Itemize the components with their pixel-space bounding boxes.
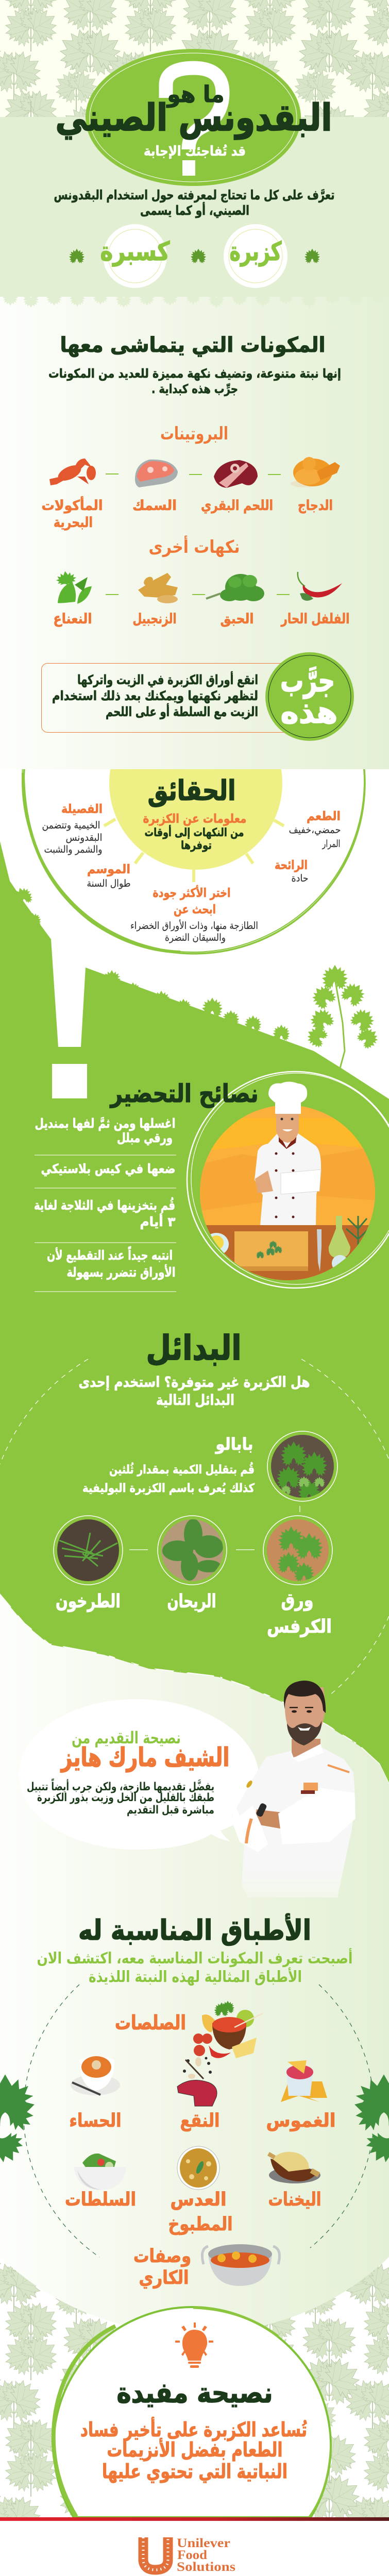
subtitle: قد تُفاجئك الإجابة: [144, 144, 246, 159]
icon: curry pot: [202, 2244, 279, 2286]
fact: family: البقدونس: [66, 832, 102, 843]
fact: aroma: الرائحة: [275, 858, 308, 872]
fact: aroma: [275, 858, 308, 884]
intro text: الصيني، أو كما يسمى: [140, 202, 249, 218]
badge: kuzbara: [224, 224, 287, 288]
culantro text: بابالو: [215, 1434, 253, 1454]
table: [206, 1216, 369, 1280]
big parsley leaves: [0, 2074, 389, 2171]
protein labels: البحرية: [54, 515, 93, 531]
uniform logo: [245, 1765, 349, 1794]
fact: quality: اختر الأكثر جودة: [153, 885, 231, 900]
description: جرِّب هذه كبداية .: [151, 382, 238, 396]
dish labels row 1: [69, 2110, 336, 2131]
tip 1: [35, 1116, 175, 1146]
icon: beef: [214, 460, 258, 488]
protein labels: الدجاج: [298, 498, 333, 514]
dish labels row 2: السلطات: [65, 2189, 136, 2210]
face: [285, 1687, 326, 1745]
dish labels row 2: العدس: [170, 2189, 227, 2210]
panel: chef advice: [19, 1681, 356, 1897]
callout text: لتظهر نكهتها ويمكنك بعد ذلك استخدام: [52, 688, 258, 704]
fact: taste: حمضي،خفيف: [289, 824, 341, 836]
fact: family: والشمر والشبت: [44, 844, 102, 855]
icon: basil: [206, 574, 264, 601]
icon: mint: [55, 570, 92, 604]
photo: celery leaf: [263, 1516, 332, 1585]
icon: ginger: [138, 573, 178, 603]
curry label: [133, 2246, 191, 2289]
icon: stew: [267, 2152, 320, 2183]
beard: [287, 1721, 322, 1745]
salsa label: الصلصات: [115, 2011, 186, 2034]
description: إنها نبتة متنوعة، وتضيف نكهة مميزة للعديد من المكونات: [48, 366, 341, 381]
facts intro: [143, 811, 246, 852]
callout box: [41, 664, 299, 733]
icon: spices: [183, 2057, 212, 2079]
culantro text: [82, 1434, 255, 1495]
chef illustration: [187, 1072, 389, 1288]
buttons: [275, 1152, 295, 1218]
tip text: الطعام بفضل الأنزيمات: [107, 2437, 282, 2462]
tip 4: الأوراق تتضرر بسهولة: [67, 1264, 175, 1280]
pale green band: [0, 117, 389, 295]
callout text: الزيت مع السلطة أو على اللحم: [106, 703, 258, 720]
icon: question mark: [166, 68, 223, 176]
hair: [284, 1681, 326, 1713]
dishes intro: [37, 1948, 352, 1986]
logo: Unilever Food Solutions: [143, 2536, 235, 2574]
advice text: [27, 1778, 214, 1817]
fact: quality: ابحث عن: [174, 902, 216, 917]
green background panel: [0, 841, 389, 1783]
heading: facts: الحقائق: [147, 774, 236, 807]
flavour labels: الفلفل الحار: [280, 611, 349, 627]
icon: lobster: [49, 459, 96, 485]
photo: chef Marc Heiz: [232, 1681, 356, 1897]
fact: family: [42, 802, 103, 855]
icon: chilli: [298, 572, 342, 601]
fact: quality: الطازجة منها، وذات الأوراق الخضراء: [130, 920, 258, 931]
icon: light bulb: [175, 2323, 213, 2368]
logo wordmark: Unilever: [177, 2536, 230, 2550]
panel: facts: [22, 769, 366, 955]
protein labels: السمك: [132, 498, 177, 514]
eyes: [290, 1707, 313, 1713]
mouth: [298, 1727, 311, 1731]
forearm: [255, 1170, 321, 1194]
orange circle: [200, 1105, 376, 1280]
rays: [104, 819, 284, 882]
curry label: وصفات: [133, 2246, 191, 2267]
tip 3: قُم بتخزينها في الثلاجة لغاية: [34, 1197, 175, 1213]
panel: suitable dishes: [0, 1913, 389, 2289]
heading: dishes: الأطباق المناسبة له: [78, 1913, 311, 1946]
heading: المكونات التي يتماشى معها: [60, 333, 326, 357]
photo: basil: [158, 1516, 227, 1585]
advice text: يفضَّل تقديمها طازجة، ولكن جرب أيضاً تتبيل: [27, 1778, 214, 1793]
tip 3: ٣ أيام: [140, 1213, 175, 1229]
panel: alternatives: [0, 1328, 389, 1695]
photo: culantro: [267, 1431, 337, 1502]
logo mark: [143, 2537, 168, 2570]
tip circle: [54, 2307, 331, 2517]
advice title: نصيحة التقديم من: [72, 1728, 181, 1748]
knife: [317, 1229, 322, 1272]
tip text: تُساعد الكزبرة على تأخير فساد: [80, 2417, 307, 2441]
chopped herbs: [256, 1241, 283, 1259]
protein labels: المأكولات: [41, 496, 103, 514]
heading: alternatives: البدائل: [146, 1328, 241, 1368]
advice text: مباشرة قبل التقديم: [127, 1804, 214, 1817]
fact: taste: المرار: [322, 838, 340, 850]
alternative labels: ورق: [281, 1590, 313, 1611]
footer bar: [0, 2517, 389, 2521]
chef jacket: [255, 1132, 321, 1225]
try-this badge: هذه: [280, 694, 338, 731]
tip 1: اغسلها ومن ثمَّ لفها بمنديل: [35, 1116, 175, 1131]
title: ما هو: [166, 81, 225, 108]
badge: kusbara: [100, 224, 170, 288]
title: [56, 81, 332, 140]
leafy edge: [0, 289, 389, 308]
parsley pattern background: [0, 0, 389, 117]
brush ring: [187, 1072, 389, 1288]
photo: tarragon: [53, 1516, 123, 1585]
fact: season: طوال السنة: [87, 878, 131, 889]
collar: [279, 1133, 297, 1149]
cutting board: [234, 1231, 308, 1271]
icon: salsa: [193, 2001, 263, 2058]
panel: ingredients: [0, 289, 389, 769]
logo wordmark: Food: [177, 2548, 207, 2562]
try-this badge: [265, 652, 354, 741]
logo wordmark: Solutions: [177, 2560, 235, 2574]
flavour labels: [54, 611, 349, 627]
icon: steak: [177, 2080, 217, 2106]
alternative labels: [56, 1590, 332, 1637]
fact: taste: الطعم: [307, 809, 341, 823]
oil bottle: [329, 1216, 350, 1272]
fact: season: [87, 862, 131, 889]
fact: family: الفصيلة: [61, 802, 103, 816]
heading: preparation tips: نصائح التحضير: [110, 1079, 259, 1108]
rosemary: [346, 1216, 368, 1246]
description: [48, 366, 341, 396]
panel: intro header: [0, 0, 389, 295]
tip 4: [47, 1246, 175, 1280]
chef hat: [268, 1082, 307, 1114]
callout: try this: [41, 652, 354, 741]
callout text: انقع أوراق الكزبرة في الزيت واتركها: [77, 671, 258, 688]
title: البقدونس الصيني: [56, 96, 332, 140]
yellow circle: [109, 769, 282, 870]
icon: lentil plate: [177, 2146, 219, 2190]
crossed arms: [232, 1788, 356, 1852]
alternatives intro: هل الكزبرة غير متوفرة؟ استخدم إحدى: [78, 1374, 310, 1391]
leafy edges of green panel: [5, 884, 365, 1754]
try-this badge: جرَّب: [280, 663, 335, 699]
lemon bowl: [210, 1233, 229, 1253]
fact: family: الخيمية وتتضمن: [42, 820, 100, 831]
tip 2: ضعها في كيس بلاستيكي: [41, 1161, 175, 1177]
dish labels row 2: [65, 2189, 322, 2235]
facts intro: معلومات عن الكزبرة: [143, 811, 246, 826]
badge: kuzbara: كزبرة: [230, 236, 282, 267]
culantro text: كذلك يُعرف باسم الكزبرة البوليفية: [82, 1482, 255, 1495]
panel: lower background: [0, 1595, 389, 2517]
brush stroke: [54, 2308, 331, 2517]
brush ring: [22, 769, 366, 955]
subheading: other flavours: نكهات أخرى: [148, 535, 240, 557]
advice text: طبقك بالقليل من الخل وزيت بذور الكزبرة: [37, 1791, 214, 1804]
connectors: [106, 594, 290, 595]
alternatives intro: [78, 1374, 310, 1409]
advice title: [60, 1728, 230, 1773]
chef figure: [255, 1082, 321, 1225]
intro text: [54, 188, 335, 218]
icon: nachos dip: [281, 2060, 327, 2102]
icon: parsley sprig: [302, 965, 383, 1068]
dish labels row 2: المطبوخ: [168, 2214, 233, 2235]
icon: soup: [71, 2056, 120, 2095]
tip 1: ورقي مبلل: [117, 1130, 173, 1146]
speech bubble: [19, 1699, 259, 1850]
icon: leaves: [67, 249, 322, 264]
tip 4: انتبه جيداً عند التقطيع لأن: [47, 1246, 173, 1263]
facts intro: من النكهات إلى أوقات: [144, 824, 244, 839]
tip 3: [34, 1197, 175, 1229]
dishes intro: الأطباق المثالية لهذه النبتة اللذيذة: [89, 1967, 302, 1986]
dish labels row 1: الغموس: [266, 2110, 336, 2131]
collar: [291, 1744, 324, 1762]
flavour labels: الزنجبيل: [133, 611, 176, 627]
fact: quality: والسيقان النضرة: [165, 932, 226, 943]
icon: exclamation dot: [52, 1064, 87, 1098]
dish labels row 1: النقع: [180, 2110, 219, 2131]
panel: preparation tips: [34, 1072, 389, 1292]
heading: useful tip: نصيحة مفيدة: [116, 2377, 273, 2409]
culantro text: قُم بتقليل الكمية بمقدار ثُلثين: [109, 1462, 255, 1477]
alternative labels: الكرفس: [267, 1616, 332, 1637]
fact: taste: [289, 809, 341, 850]
section background: [0, 295, 389, 769]
fact: aroma: حادة: [292, 873, 308, 884]
badge: kusbara: كسبرة: [100, 236, 170, 267]
jacket: [232, 1748, 356, 1897]
dish labels row 2: اليخنات: [268, 2189, 322, 2210]
logo wordmark: [177, 2536, 235, 2574]
fact: quality: [130, 885, 258, 943]
facts intro: توفرها: [181, 839, 212, 852]
callout text: [52, 671, 258, 720]
flavour labels: الحبق: [221, 611, 253, 627]
protein labels: اللحم البقري: [201, 498, 273, 514]
neck: [292, 1739, 320, 1758]
face: [276, 1113, 299, 1143]
alternative labels: الريحان: [167, 1591, 216, 1612]
protein labels: [41, 496, 333, 531]
fact: season: الموسم: [87, 862, 130, 876]
icon: chicken: [291, 457, 340, 487]
alternative labels: الطرخون: [56, 1591, 121, 1612]
tip text: [80, 2417, 307, 2483]
tip text: النباتية التي تحتوي عليها: [102, 2460, 287, 2483]
curry label: الكاري: [139, 2267, 189, 2289]
green title ellipse: [86, 49, 301, 186]
dish labels row 1: الحساء: [69, 2110, 122, 2131]
icon: salmon: [135, 460, 178, 487]
alternatives intro: البدائل التالية: [156, 1392, 234, 1409]
subheading: proteins: البروتينات: [160, 423, 228, 444]
panel: useful tip: [54, 2307, 331, 2517]
flavour labels: النعناع: [54, 611, 92, 627]
icon: salad: [74, 2154, 126, 2190]
advice title: الشيف مارك هايز: [60, 1742, 230, 1773]
